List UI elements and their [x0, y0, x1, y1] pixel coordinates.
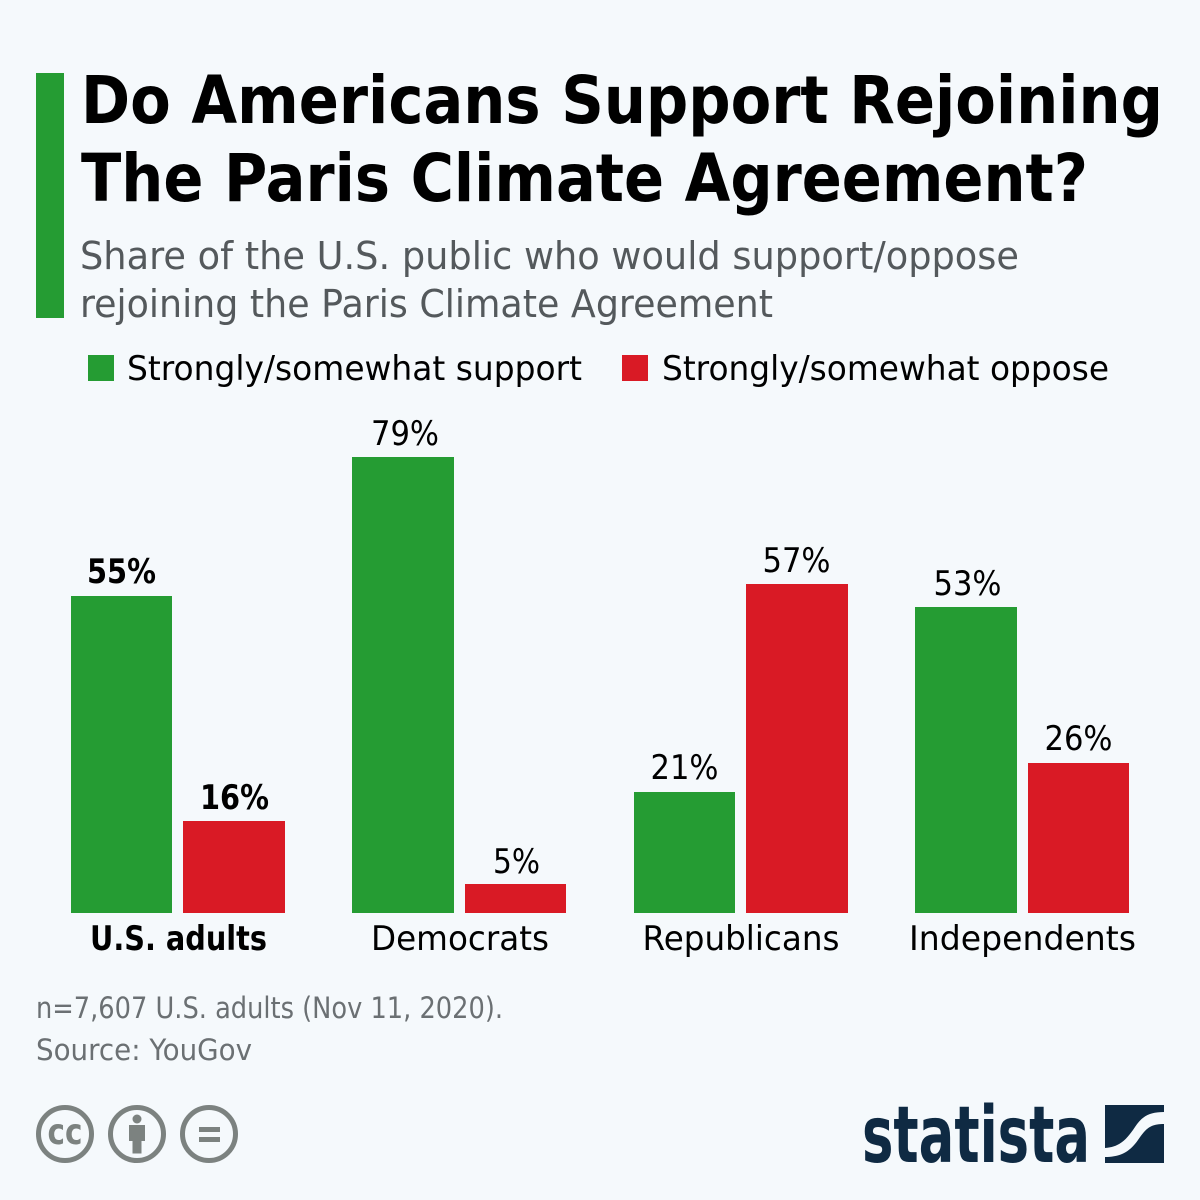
group: Republicans — [634, 541, 848, 959]
subtitle: rejoining the Paris Climate Agreement — [80, 282, 773, 326]
source note — [36, 991, 503, 1067]
statista logo: statista — [862, 1091, 1090, 1181]
subtitle — [80, 234, 1019, 326]
legend: Strongly/somewhat oppose — [662, 349, 1109, 389]
legend — [88, 349, 1109, 389]
icon: attribution — [110, 1108, 164, 1160]
group: Republicans: 21% — [650, 748, 718, 788]
icon: no derivatives — [182, 1108, 236, 1160]
group: U.S. adults: 16% — [200, 778, 269, 818]
legend: Strongly/somewhat support — [127, 349, 582, 389]
title: The Paris Climate Agreement? — [81, 140, 1088, 217]
group: U.S. adults: 55% — [87, 552, 156, 592]
source note: Source: YouGov — [36, 1033, 252, 1067]
group: U.S. adults — [71, 552, 285, 959]
group: Independents: 26% — [1044, 719, 1112, 759]
group: Democrats: Democrats — [371, 919, 549, 959]
title — [81, 62, 1163, 217]
subtitle: Share of the U.S. public who would support/oppose — [80, 234, 1019, 278]
group: Independents: Independents — [909, 919, 1136, 959]
group: Democrats: 79% — [371, 414, 439, 454]
group: Independents — [909, 564, 1136, 959]
icon: creative commons — [38, 1108, 92, 1160]
group: Republicans: 57% — [762, 541, 830, 581]
group: Democrats: 5% — [493, 842, 540, 882]
group: U.S. adults: U.S. adults — [90, 919, 267, 959]
group: Republicans: Republicans — [642, 919, 840, 959]
group: Democrats — [352, 414, 566, 959]
bar chart — [71, 414, 1136, 959]
icon: creative commons: cc — [48, 1112, 82, 1153]
source note: n=7,607 U.S. adults (Nov 11, 2020). — [36, 991, 503, 1025]
group: Independents: 53% — [934, 564, 1002, 604]
accent bar — [36, 73, 64, 318]
